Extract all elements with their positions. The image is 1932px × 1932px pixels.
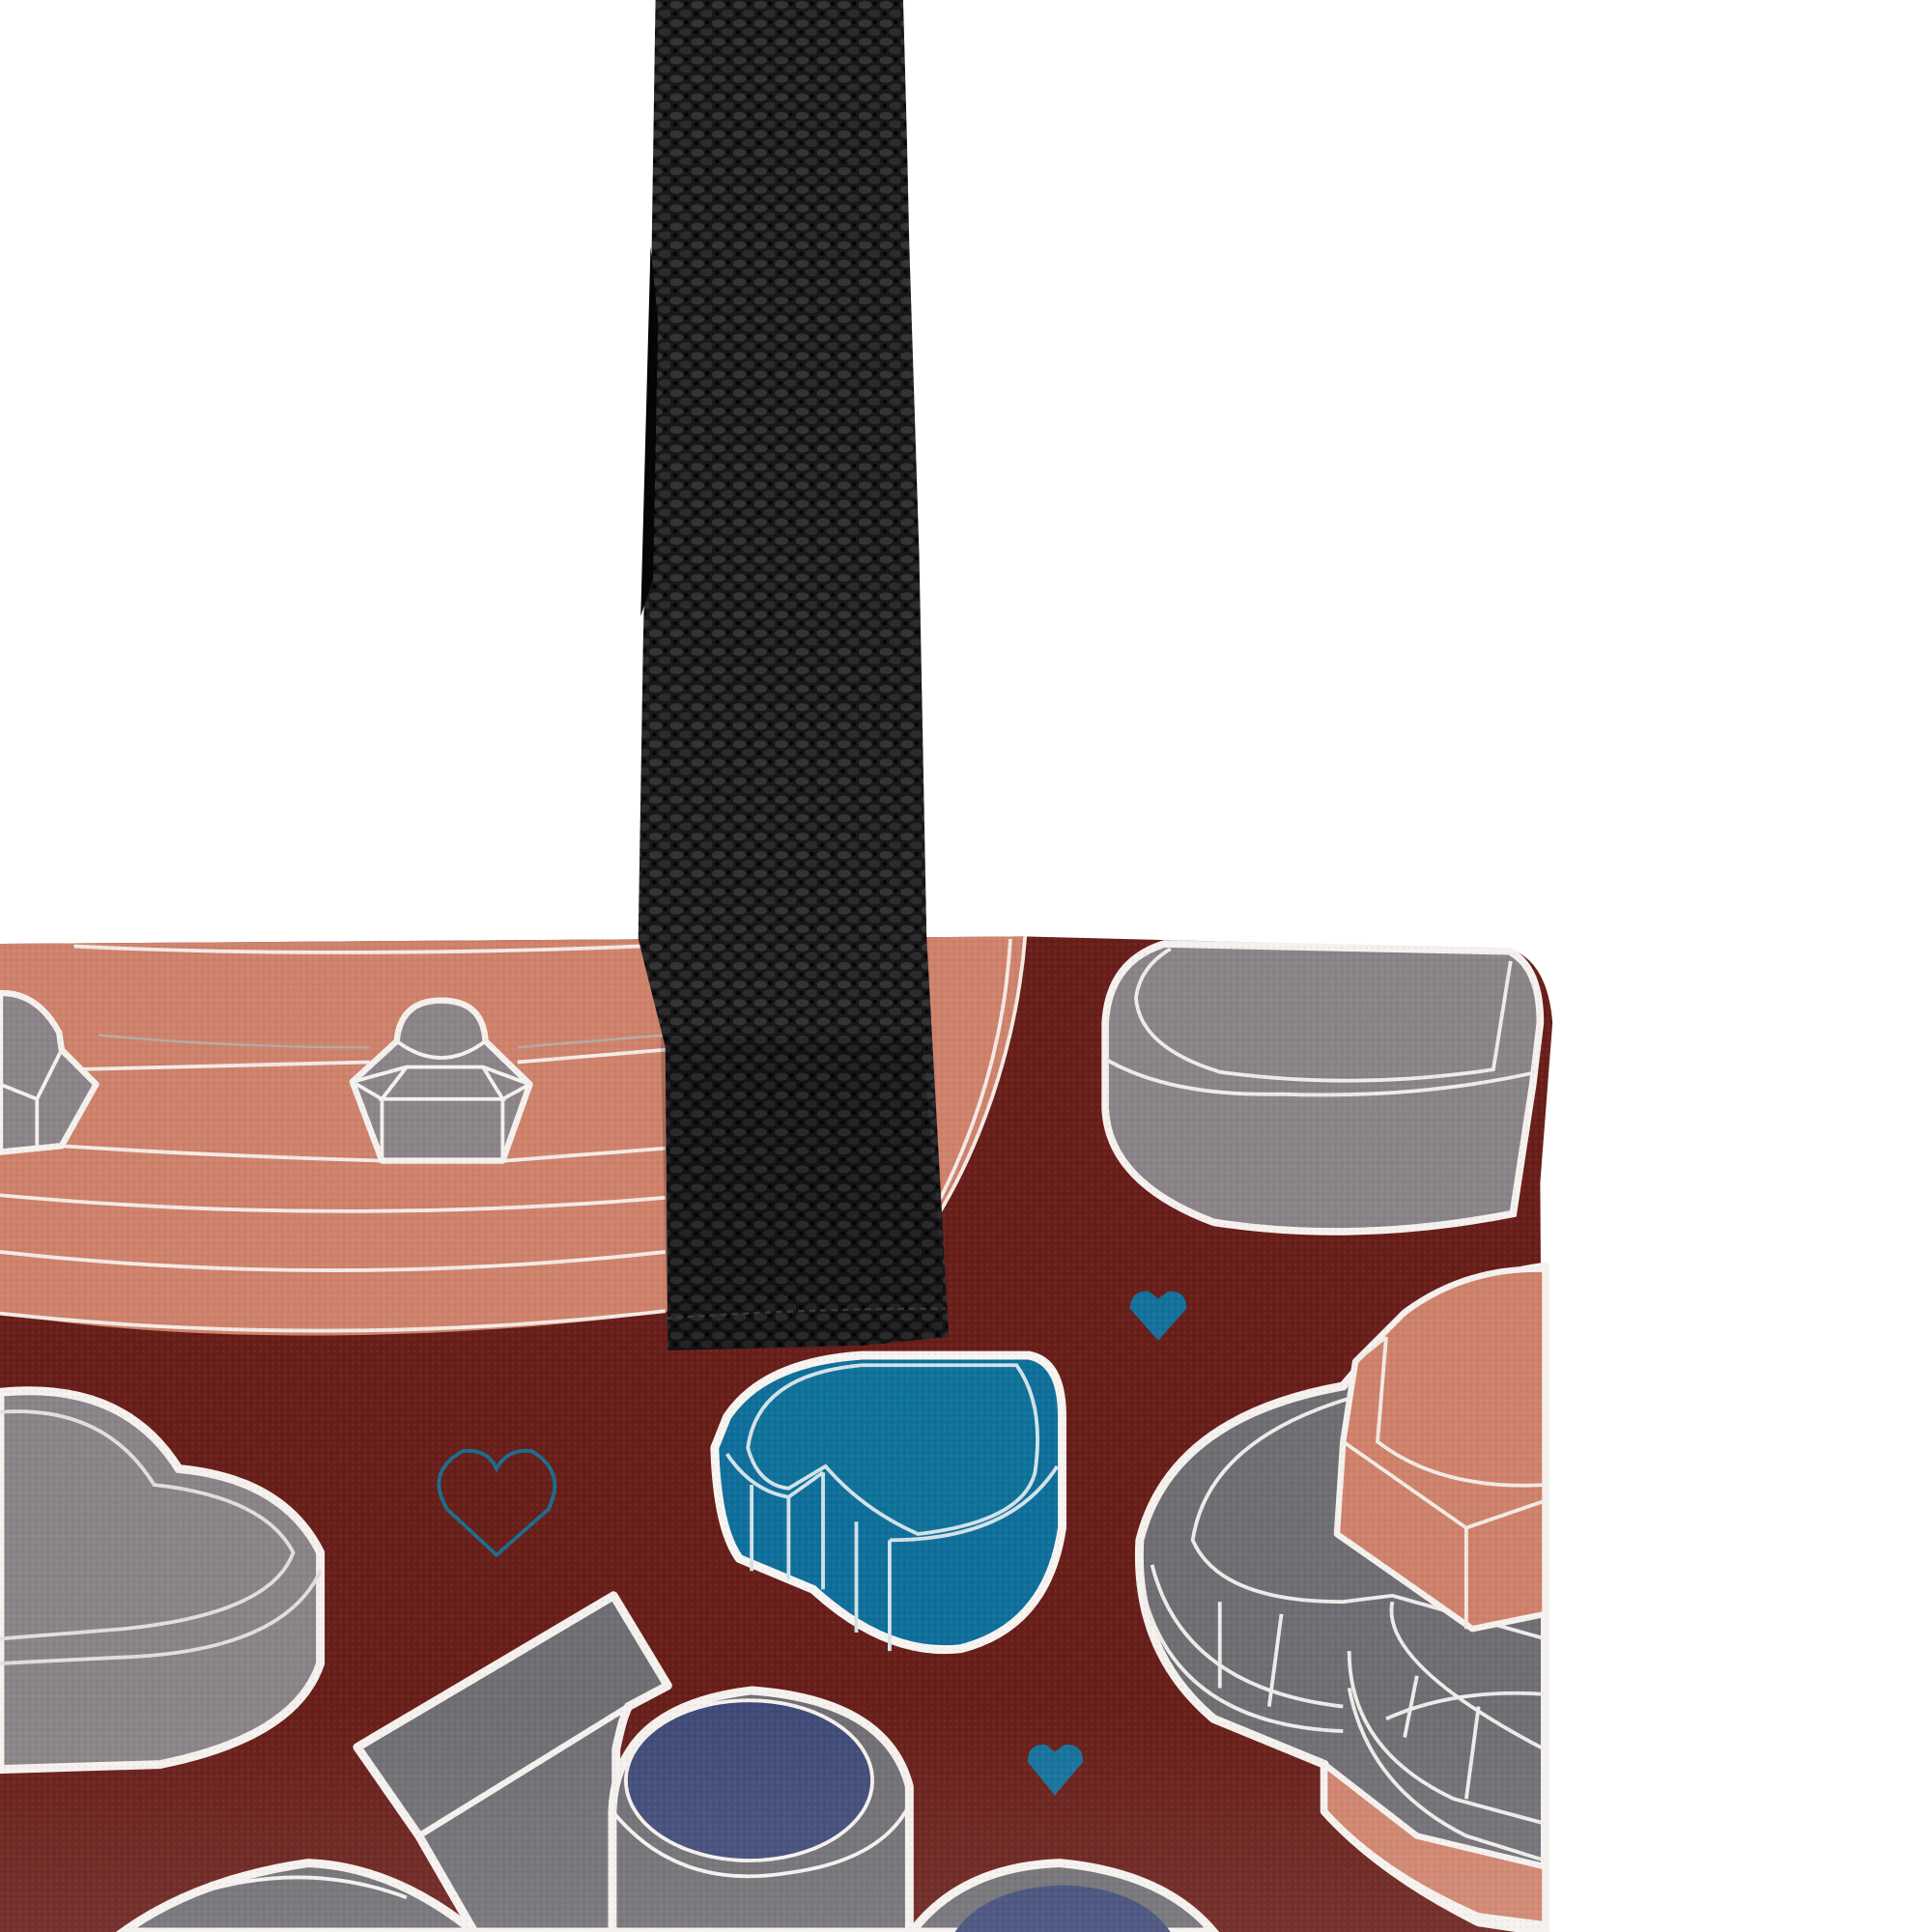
grey ring: bottom left xyxy=(124,1863,474,1932)
nut icon: centre xyxy=(353,1001,529,1161)
salmon nut on rings xyxy=(1337,1269,1545,1629)
bag body xyxy=(0,936,1552,1932)
blue heart box xyxy=(715,1355,1062,1651)
fabric sheen xyxy=(0,1355,1545,1932)
heart outline xyxy=(439,1451,554,1555)
nut icon: left xyxy=(0,993,96,1152)
navy cylinder xyxy=(612,1690,909,1932)
small blue heart: right xyxy=(1130,1292,1186,1341)
black woven strap xyxy=(639,0,949,1350)
salmon pattern band xyxy=(0,936,1025,1335)
grey heart box: top right xyxy=(1105,944,1540,1232)
navy cylinder: bottom xyxy=(912,1863,1213,1932)
stacked grey and salmon rings with nut xyxy=(1139,1266,1545,1932)
grey heart box: left xyxy=(0,1391,321,1770)
grey hex bolt xyxy=(357,1596,668,1932)
small blue heart: bottom xyxy=(1028,1745,1083,1795)
fabric texture xyxy=(0,936,1552,1932)
